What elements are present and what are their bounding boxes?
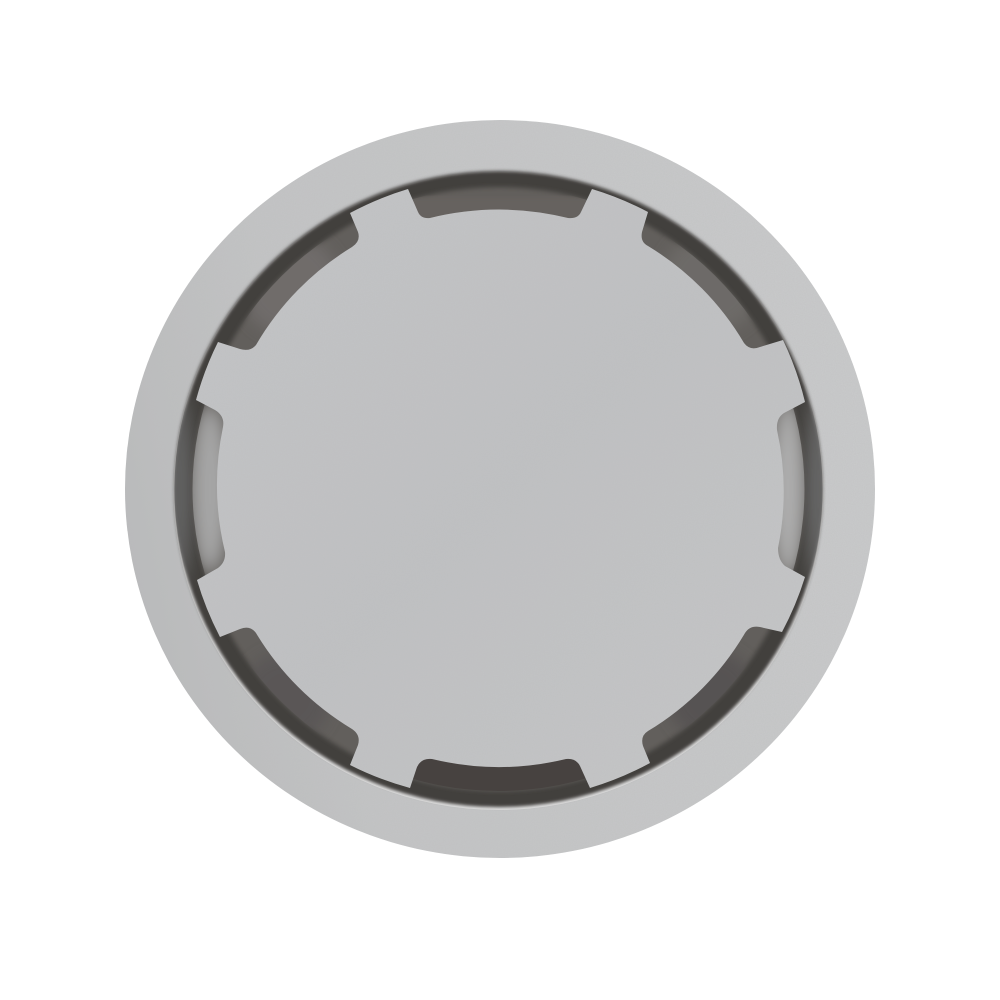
- recessed channel: [168, 171, 830, 810]
- lower left channel shading: [260, 666, 318, 721]
- centre plate with eight lugs: [196, 189, 805, 788]
- lower right channel shading: [676, 658, 740, 724]
- left channel outer band: [174, 402, 196, 576]
- right channel outer band: [802, 404, 822, 574]
- channel floor: [192, 187, 804, 791]
- outer ring: [125, 120, 875, 858]
- illustration: machined metal disc: [125, 120, 875, 858]
- right channel highlight: [776, 408, 804, 570]
- upper right channel shading: [672, 244, 750, 322]
- top channel shading: [412, 196, 586, 202]
- left channel highlight: [192, 404, 225, 575]
- upper left channel shading: [248, 242, 331, 328]
- bottom channel shading: [413, 759, 586, 791]
